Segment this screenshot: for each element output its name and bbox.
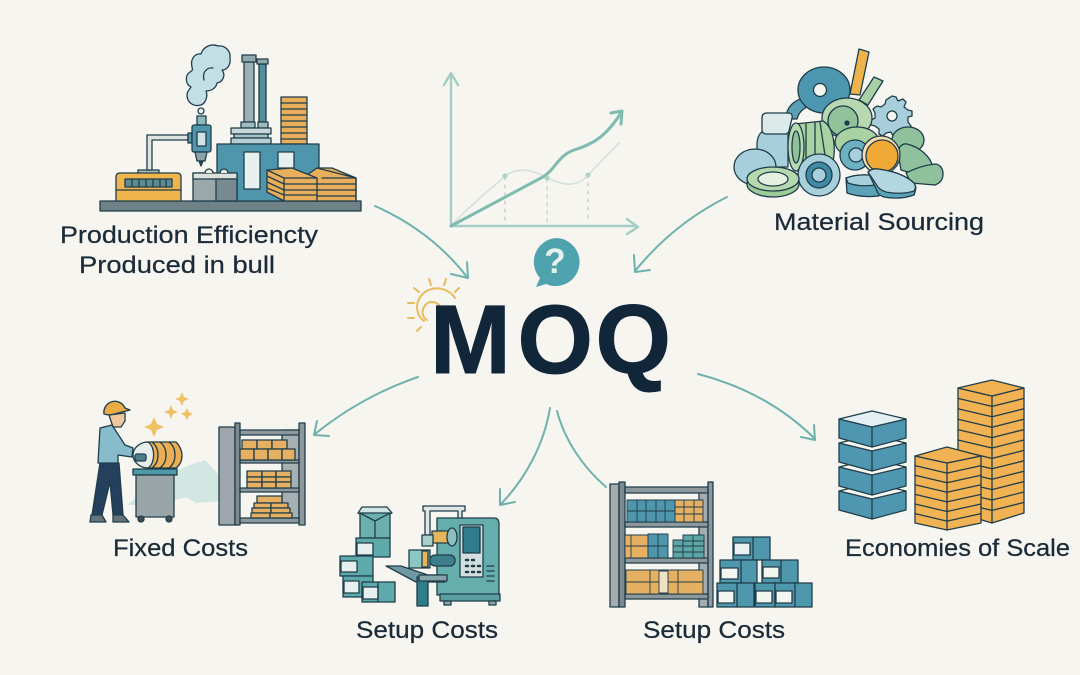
green mound <box>835 127 879 157</box>
large teal disk <box>798 67 850 113</box>
icon: pile of blue boxes <box>717 537 812 607</box>
blue stack <box>839 411 906 519</box>
worker torso <box>98 425 133 463</box>
stacked pallets right <box>307 168 356 201</box>
factory building <box>217 144 319 201</box>
pipe <box>147 135 188 170</box>
icon: sun glow <box>408 279 459 331</box>
jar <box>757 113 792 167</box>
background haze <box>127 460 220 505</box>
orange stack on roof <box>281 97 307 144</box>
yellow bar <box>850 49 869 95</box>
green disk <box>822 98 872 138</box>
cart <box>133 469 177 522</box>
worker hat <box>104 401 130 415</box>
teal disk <box>840 140 870 170</box>
pills <box>846 169 916 198</box>
gray bins <box>193 169 237 201</box>
icon: pile of materials <box>734 49 943 198</box>
teal ring back <box>786 99 816 119</box>
icon: worker at machine <box>90 392 220 522</box>
smoke cloud <box>186 45 230 106</box>
icon: rack with inventory <box>610 482 713 607</box>
short orange stack <box>915 447 981 530</box>
label: Production Efficiencty: Production Efficiencty <box>60 222 318 249</box>
factory base platform <box>100 201 361 211</box>
orange disk <box>862 136 900 174</box>
icon: setup machine with boxes <box>340 506 500 606</box>
icon: question bubble: ? <box>544 242 566 281</box>
label: Setup Costs right: Setup Costs <box>643 617 785 644</box>
icon: factory production line <box>100 45 361 211</box>
arrow: production to MOQ <box>375 206 468 278</box>
work table <box>386 566 447 606</box>
stacked pallets left <box>267 168 317 201</box>
chart: rising growth curve <box>444 73 638 234</box>
orange production machine <box>116 170 181 201</box>
stacked boxes <box>340 507 395 602</box>
arrow: MOQ to fixed costs <box>314 377 418 436</box>
label: Material Sourcing: Material Sourcing <box>774 209 984 236</box>
machine frame <box>423 506 465 535</box>
label: Produced in bull: Produced in bull <box>79 252 275 279</box>
sparkles <box>144 392 193 437</box>
arrow: MOQ to setup costs <box>500 408 550 505</box>
tall orange stack <box>958 380 1024 523</box>
green bar <box>859 77 883 105</box>
chimneys <box>231 55 271 144</box>
boxes on shelves <box>240 440 295 518</box>
light blue disk <box>798 154 840 196</box>
title: MOQ: MOQ <box>430 285 671 394</box>
label: Fixed Costs: Fixed Costs <box>113 535 248 562</box>
right green blobs <box>892 127 943 185</box>
green ribbed cylinder <box>788 121 834 171</box>
arrow: MOQ to shelving <box>557 411 606 487</box>
press tool <box>409 550 455 568</box>
gear <box>871 96 912 136</box>
shelf goods <box>625 500 704 594</box>
blue blob left <box>734 149 776 185</box>
label: Setup Costs left: Setup Costs <box>356 617 498 644</box>
worker head <box>109 413 125 427</box>
machine body <box>437 518 500 605</box>
arrow: MOQ to economies of scale <box>698 374 815 440</box>
icon: shelving with orange boxes <box>219 423 305 525</box>
machine head <box>422 528 457 546</box>
worker shoes <box>90 515 129 522</box>
green ring <box>747 167 799 197</box>
label: Economies of Scale: Economies of Scale <box>845 535 1070 562</box>
worker legs <box>92 463 123 515</box>
icon: question bubble <box>534 238 580 287</box>
arrow: materials to MOQ <box>634 197 727 272</box>
drum <box>133 442 182 468</box>
valve unit <box>188 116 211 166</box>
icon: economies of scale stacks <box>839 380 1024 530</box>
